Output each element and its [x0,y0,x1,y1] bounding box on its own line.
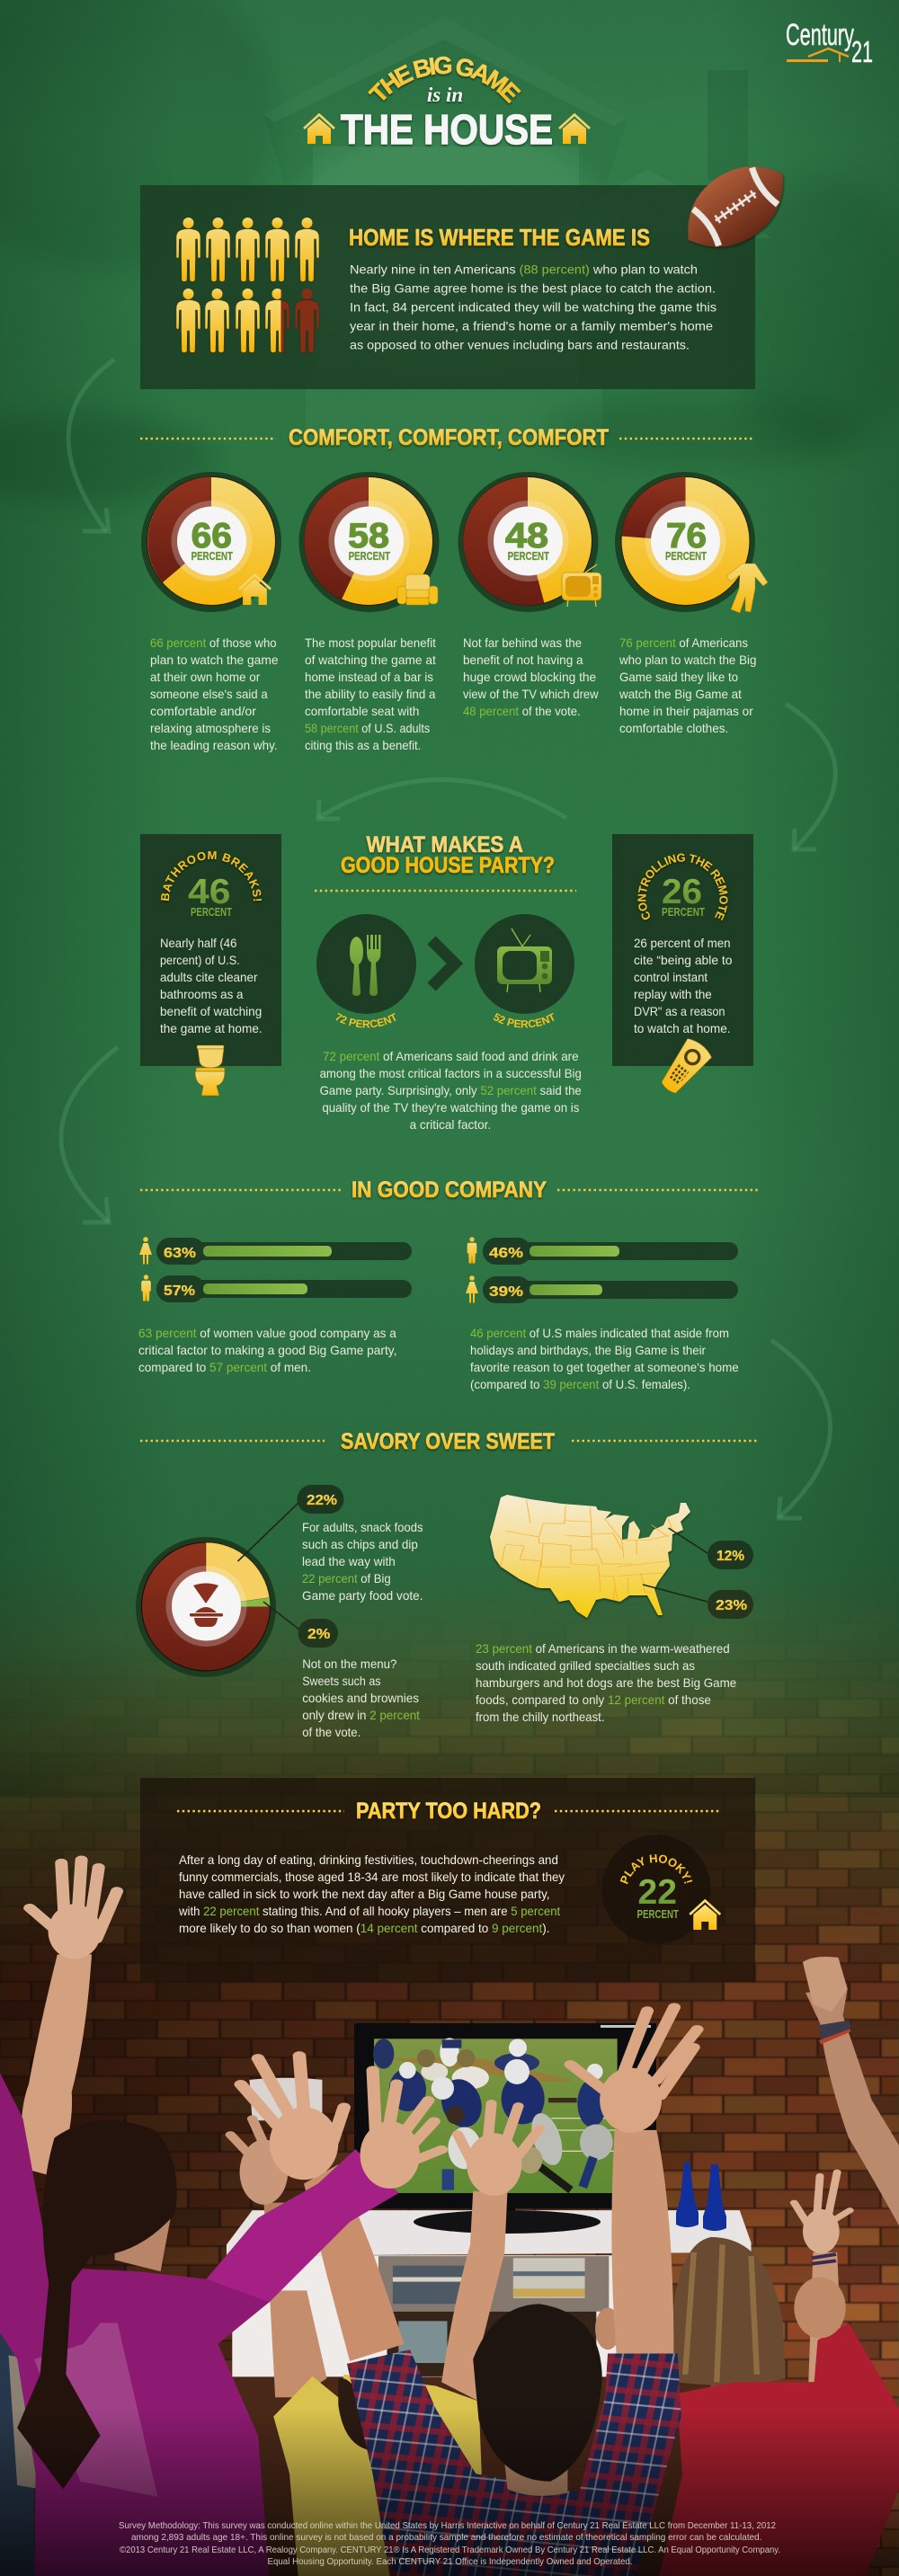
text: party factors: quality of the TV they're watching the game on is [322,1100,579,1115]
icon: pajamas [726,564,768,613]
text: regional food: 23 percent of Americans in the warm-weathered [476,1641,730,1656]
body text: After a long day of eating, drinking festivities, touchdown-cheerings and [179,1852,558,1867]
donut chart 76 percent [615,472,768,613]
body text: funny commercials, those aged 18-34 are most likely to indicate that they [179,1870,565,1884]
text: regional food: south indicated grilled specialties such as [476,1658,695,1673]
donut chart 48 percent: 48 [505,517,548,555]
text: sweets: cookies and brownies [302,1691,419,1705]
bar: men 57 percent [141,1275,412,1302]
fan: red shirt [659,2323,899,2576]
heading: PARTY TOO HARD? [356,1799,541,1824]
panel: party too hard [140,1778,755,1982]
food versus TV comparison [316,914,574,1028]
text: good company men: favorite reason to get together at someone's home [470,1360,739,1374]
body text: more likely to do so than women (14 percent compared to 9 percent). [179,1921,550,1935]
body text: DVR" as a reason [634,1004,725,1018]
text: good company men [470,1326,739,1391]
label 72 percent [336,1012,396,1028]
fan: left woman in magenta with long hair [0,2073,398,2576]
badge: play hooky: PLAY HOOKY! [620,1854,692,1884]
text: good company women: compared to 57 percent of men. [138,1360,311,1374]
body text: as opposed to other venues including bars and restaurants. [350,338,690,352]
text: 66 percent: 66 percent of those who [150,635,277,650]
icon: football [669,146,802,268]
body text [160,936,263,1035]
text: sweets [302,1657,420,1739]
text: 48 percent: huge crowd blocking the [463,670,596,684]
panel: home is where the game is [140,185,755,389]
label 52 percent: 52 PERCENT [494,1012,554,1028]
body text: adults cite cleaner [160,970,258,984]
donut chart 48 percent [458,472,601,612]
edge vignette [0,0,899,1798]
heading: what makes a good house party: WHAT MAKES A [367,832,523,857]
text: 76 percent: watch the Big Game at [619,687,742,701]
text: 58 percent: 58 percent of U.S. adults [305,721,430,735]
text: 76 percent [619,635,756,735]
badge: play hooky [602,1835,721,1943]
panel: bathroom breaks: PERCENT [191,906,232,919]
survey methodology footnote [119,2520,780,2567]
text: snack foods: Game party food vote. [302,1588,423,1603]
text: 76 percent: comfortable clothes. [619,721,728,735]
body text: benefit of watching [160,1004,262,1018]
green field background [0,0,899,1977]
body text: to watch at home. [634,1021,731,1035]
label 72 percent: 72 PERCENT [336,1012,396,1028]
text: snack foods: lead the way with [302,1554,396,1568]
text: 48 percent: Not far behind was the [463,635,582,650]
bar: women 39 percent [466,1275,738,1303]
icon: remote control [655,1035,714,1099]
brick wall background [0,1528,899,2576]
text: 66 percent: plan to watch the game [150,653,279,667]
cabinet [227,2210,752,2376]
text: snack foods: such as chips and dip [302,1537,418,1551]
panel: controlling the remote: 26 [662,873,702,911]
text: good company men: (compared to 39 percent of U.S. females). [470,1377,690,1391]
lamp [249,2078,322,2120]
text: 58 percent: The most popular benefit [305,635,436,650]
body text: cite “being able to [634,953,733,967]
decorative flow arrow 2 [318,780,566,819]
fan: man in plaid shirt with dark hair [347,2007,698,2576]
text: 66 percent [150,635,279,752]
text: 48 percent: 48 percent of the vote. [463,704,581,718]
text: 48 percent: benefit of not having a [463,653,583,667]
donut chart 66 percent: PERCENT [191,550,233,563]
Century 21 logo: 21 [851,35,873,68]
fan: small hand far right [794,2172,850,2382]
panel: bathroom breaks: BATHROOM BREAKS! [160,851,262,902]
body text [634,936,733,1035]
donut chart 58 percent: PERCENT [349,550,390,563]
text: good company men: 46 percent of U.S males indicated that aside from [470,1326,729,1340]
heading: HOME IS WHERE THE GAME IS [349,224,650,251]
section heading: in good company: IN GOOD COMPANY [352,1177,547,1203]
text: 66 percent: at their own home or [150,670,261,684]
body text: In fact, 84 percent indicated they will be watching the game this [350,300,717,315]
icon: chip and dip [190,1584,223,1627]
panel: bathroom breaks: 46 [188,873,230,911]
text: 58 percent: comfortable seat with [305,704,419,718]
text: party factors [320,1049,582,1132]
donut chart 66 percent [141,472,281,612]
text: regional food [476,1641,736,1724]
fan: left woman's raised right arm [21,1860,117,2176]
icon: house [690,1900,720,1930]
body text: bathrooms as a [160,987,244,1001]
text: regional food: from the chilly northeast. [476,1710,604,1724]
decorative flow arrow 5 [771,1340,831,1518]
survey methodology footnote: among 2,893 adults age 18+. This online survey is not based on a probability sample and therefore no estimate of theoretical sampling error can be calculated. [131,2532,762,2543]
text: sweets: Not on the menu? [302,1657,397,1671]
text: good company women: 63 percent of women value good company as a [138,1326,396,1340]
badge: play hooky: 22 [638,1873,677,1912]
text: party factors: among the most critical factors in a successful Big [320,1066,582,1080]
bar: women 63 percent: 63% [164,1246,196,1261]
fans photo [0,1860,899,2576]
text: 76 percent: home in their pajamas or [619,704,753,718]
text: 66 percent: someone else's said a [150,687,268,701]
body text: replay with the [634,987,712,1001]
body text [350,262,717,352]
blue bottles [676,2162,726,2231]
survey methodology footnote: ©2013 Century 21 Real Estate LLC, A Realogy Company. CENTURY 21® Is A Registered Trademark Owned By Century 21 Real Estate LLC. An Equal Opportunity Company. [120,2545,780,2555]
text: good company women [138,1326,396,1374]
heading: what makes a good house party [341,832,555,878]
panel: controlling the remote [612,834,753,1093]
body text: the game at home. [160,1021,263,1035]
Century 21 logo: Century [786,18,854,52]
text: regional food: foods, compared to only 12 percent of those [476,1692,711,1707]
survey methodology footnote: Equal Housing Opportunity. Each CENTURY 21 Office is Independently Owned and Operated. [268,2556,633,2567]
bar: men 46 percent: 46% [489,1246,523,1261]
text: 58 percent [305,635,436,752]
donut chart 76 percent: PERCENT [665,550,707,563]
survey methodology footnote: Survey Methodology: This survey was conducted online within the United States by Harris Interactive on behalf of Century 21 Real Estate LLC from December 11-13, 2012 [119,2520,776,2531]
title [303,56,591,153]
callout: 23 percent [643,1585,753,1619]
text: 58 percent: of watching the game at [305,653,436,667]
callout: 12 percent [669,1528,753,1569]
text: sweets: Sweets such as [302,1674,381,1688]
decorative flow arrow 4 [61,1047,118,1222]
text: 66 percent: the leading reason why. [150,738,278,752]
donut chart 58 percent: 58 [348,517,389,555]
callout: 2 percent [263,1602,338,1648]
donut chart 58 percent [298,472,439,612]
greater-than sign [432,940,455,987]
text: snack foods [302,1520,423,1603]
text: snack foods: 22 percent of Big [302,1571,391,1586]
Century 21 logo [786,18,873,68]
callout: 12 percent: 12% [717,1549,744,1564]
icon: toilet [195,1045,225,1096]
text: party factors: a critical factor. [410,1117,491,1132]
bottom fade [0,2409,899,2576]
fan: upper right arm [803,1957,899,2225]
text: 48 percent [463,635,599,718]
text: 76 percent: 76 percent of Americans [619,635,748,650]
text: 48 percent: view of the TV which drew [463,687,599,701]
fan: hand over magenta sleeve [360,2070,441,2189]
donut chart 48 percent: PERCENT [508,550,549,563]
body text: Nearly nine in ten Americans (88 percent) who plan to watch [350,262,698,277]
callout: 2 percent: 2% [307,1627,330,1642]
donut chart 76 percent: 76 [666,517,707,555]
donut chart: food vote [136,1537,276,1677]
TV circle [475,914,574,1014]
body text: percent) of U.S. [160,953,240,967]
section heading: comfort: COMFORT, COMFORT, COMFORT [289,425,609,450]
title: THE HOUSE [341,106,553,153]
text: snack foods: For adults, snack foods [302,1520,423,1534]
callout: 23 percent: 23% [716,1598,747,1613]
map: United States [490,1495,690,1618]
panel: bathroom breaks [140,834,281,1097]
text: 76 percent: Game said they like to [619,670,738,684]
fan: back arm with hands [230,2056,405,2397]
badge: play hooky: PERCENT [636,1908,679,1921]
text: regional food: hamburgers and hot dogs are the best Big Game [476,1675,736,1690]
text: 58 percent: home instead of a bar is [305,670,433,684]
callout: 22 percent [237,1485,343,1561]
food circle [316,914,416,1014]
icon: armchair [397,574,438,605]
text: 66 percent: comfortable and/or [150,704,256,718]
TV screen: football game [373,2038,618,2193]
bar: men 46 percent [467,1237,738,1265]
text: good company women: critical factor to making a good Big Game party, [138,1343,396,1357]
body text: with 22 percent stating this. And of all hooky players – men are 5 percent [178,1904,560,1918]
television [354,2023,656,2234]
paper grain texture [0,0,899,1798]
donut chart 66 percent: 66 [191,517,232,555]
bar: men 57 percent: 57% [164,1284,195,1299]
text: sweets: only drew in 2 percent [302,1708,420,1722]
callout: 22 percent: 22% [307,1493,337,1508]
body text: control instant [634,970,708,984]
floor [218,2376,711,2576]
fan: fist [595,2277,846,2349]
people icons showing 88 percent [176,218,319,352]
body text: have called in sick to work the next day after a Big Game house party, [179,1887,550,1901]
text: 76 percent: who plan to watch the Big [619,653,756,667]
title: is in [427,84,463,106]
body text: the Big Game agree home is the best place to catch the action. [350,280,716,295]
fan: yellow shirt and arm [273,2103,539,2576]
icon: house [239,575,271,605]
body text: year in their home, a friend's home or a family member's home [350,318,713,333]
text: 58 percent: the ability to easily find a [305,687,436,701]
text: 58 percent: citing this as a benefit. [305,738,421,752]
photo: TV room and fans [218,2078,752,2576]
text: party factors: 72 percent of Americans said food and drink are [323,1049,579,1063]
bar: women 63 percent [139,1237,412,1265]
body text [178,1852,565,1935]
section heading: savory over sweet: SAVORY OVER SWEET [341,1429,555,1454]
text: party factors: Game party. Surprisingly, only 52 percent said the [320,1083,582,1097]
background house silhouette [0,0,899,503]
decorative flow arrow 3 [786,704,835,849]
text: sweets: of the vote. [302,1725,360,1739]
text: 66 percent: relaxing atmosphere is [150,721,271,735]
title: THE BIG GAME [367,56,521,106]
decorative flow arrow 1 [68,360,114,531]
label 52 percent [494,1012,554,1028]
bar: women 39 percent: 39% [489,1284,523,1300]
fan: woman with brown hair [671,2237,786,2385]
panel: controlling the remote: PERCENT [662,906,705,919]
text: good company men: holidays and birthdays, the Big Game is their [470,1343,706,1357]
body text: Nearly half (46 [160,936,237,950]
body text: 26 percent of men [634,936,731,950]
panel: controlling the remote: CONTROLLING THE REMOTE [637,854,728,922]
heading: what makes a good house party: GOOD HOUSE PARTY? [341,853,555,878]
icon: television [562,560,601,607]
